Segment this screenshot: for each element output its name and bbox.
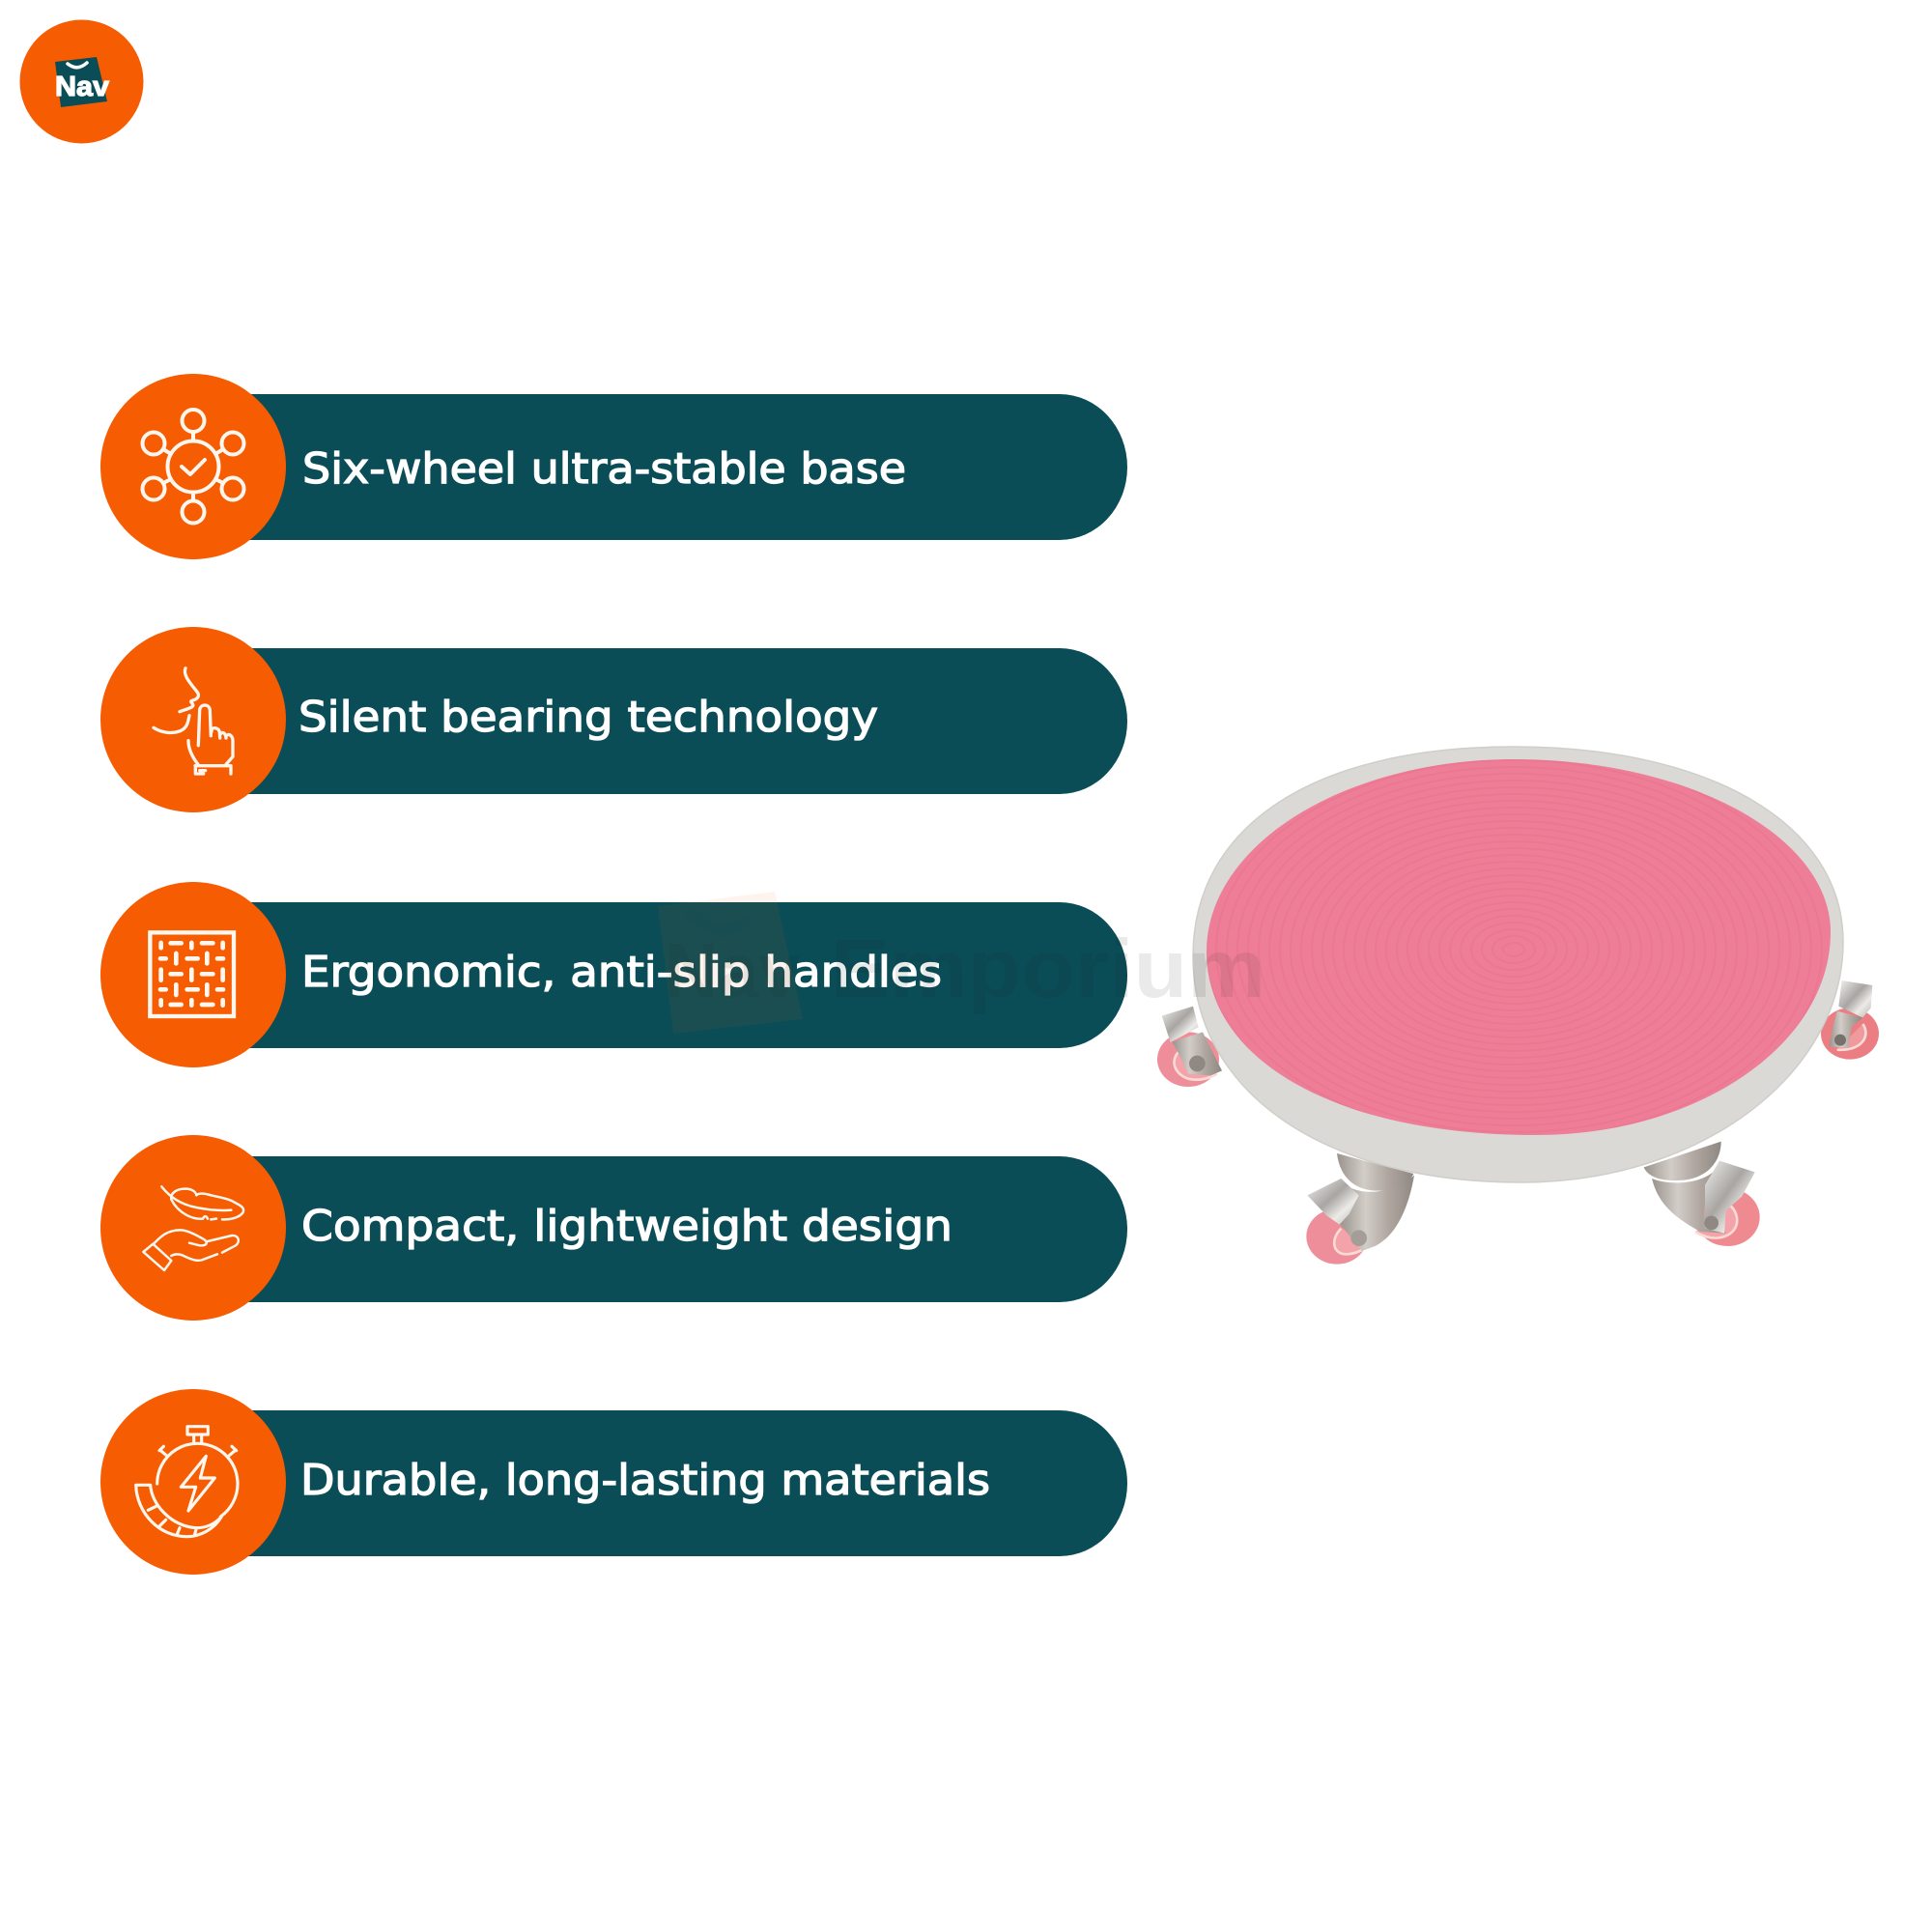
caster: left (1157, 1007, 1222, 1087)
bar (193, 902, 1127, 1048)
orange icon circle (100, 1389, 286, 1575)
label: Durable, long-lasting materials (300, 1456, 990, 1505)
caster: front right (1644, 1142, 1760, 1246)
bar (193, 1156, 1127, 1302)
logo badge: Nav (55, 71, 109, 102)
logo badge (19, 19, 143, 143)
caster: right (1821, 980, 1879, 1060)
seat pink surface (1207, 759, 1831, 1135)
icon: six connected nodes with check (143, 410, 243, 524)
seat rim (1193, 747, 1843, 1182)
orange icon circle (100, 1135, 286, 1321)
label: Ergonomic, anti-slip handles (301, 948, 942, 997)
bar (193, 394, 1127, 540)
icon: stopwatch with lightning bolt (136, 1427, 238, 1537)
feature row: silent bearing (100, 627, 1127, 812)
feature row: durable materials (100, 1389, 1127, 1575)
orange icon circle (100, 882, 286, 1067)
icon: feather over hand (143, 1186, 243, 1270)
label: Compact, lightweight design (301, 1202, 952, 1251)
orange icon circle (100, 627, 286, 812)
product photo: rolling stool (1157, 747, 1879, 1264)
feature row: anti-slip handles (100, 882, 1127, 1067)
bar (193, 648, 1127, 794)
icon: textured grip square (150, 932, 234, 1016)
label: Six-wheel ultra-stable base (302, 444, 906, 494)
feature row: lightweight design (100, 1135, 1127, 1321)
watermark: Nav Emporium: Emporium (831, 923, 1265, 1015)
bar (193, 1410, 1127, 1556)
orange icon circle (100, 374, 286, 559)
feature row: six-wheel base (100, 374, 1127, 559)
caster: front left (1306, 1153, 1414, 1264)
icon: finger to lips (154, 668, 233, 774)
label: Silent bearing technology (298, 693, 878, 742)
watermark: Nav Emporium: Nav (665, 927, 800, 1013)
seat concentric rings (1206, 753, 1822, 1146)
watermark: Nav Emporium (658, 892, 1265, 1034)
